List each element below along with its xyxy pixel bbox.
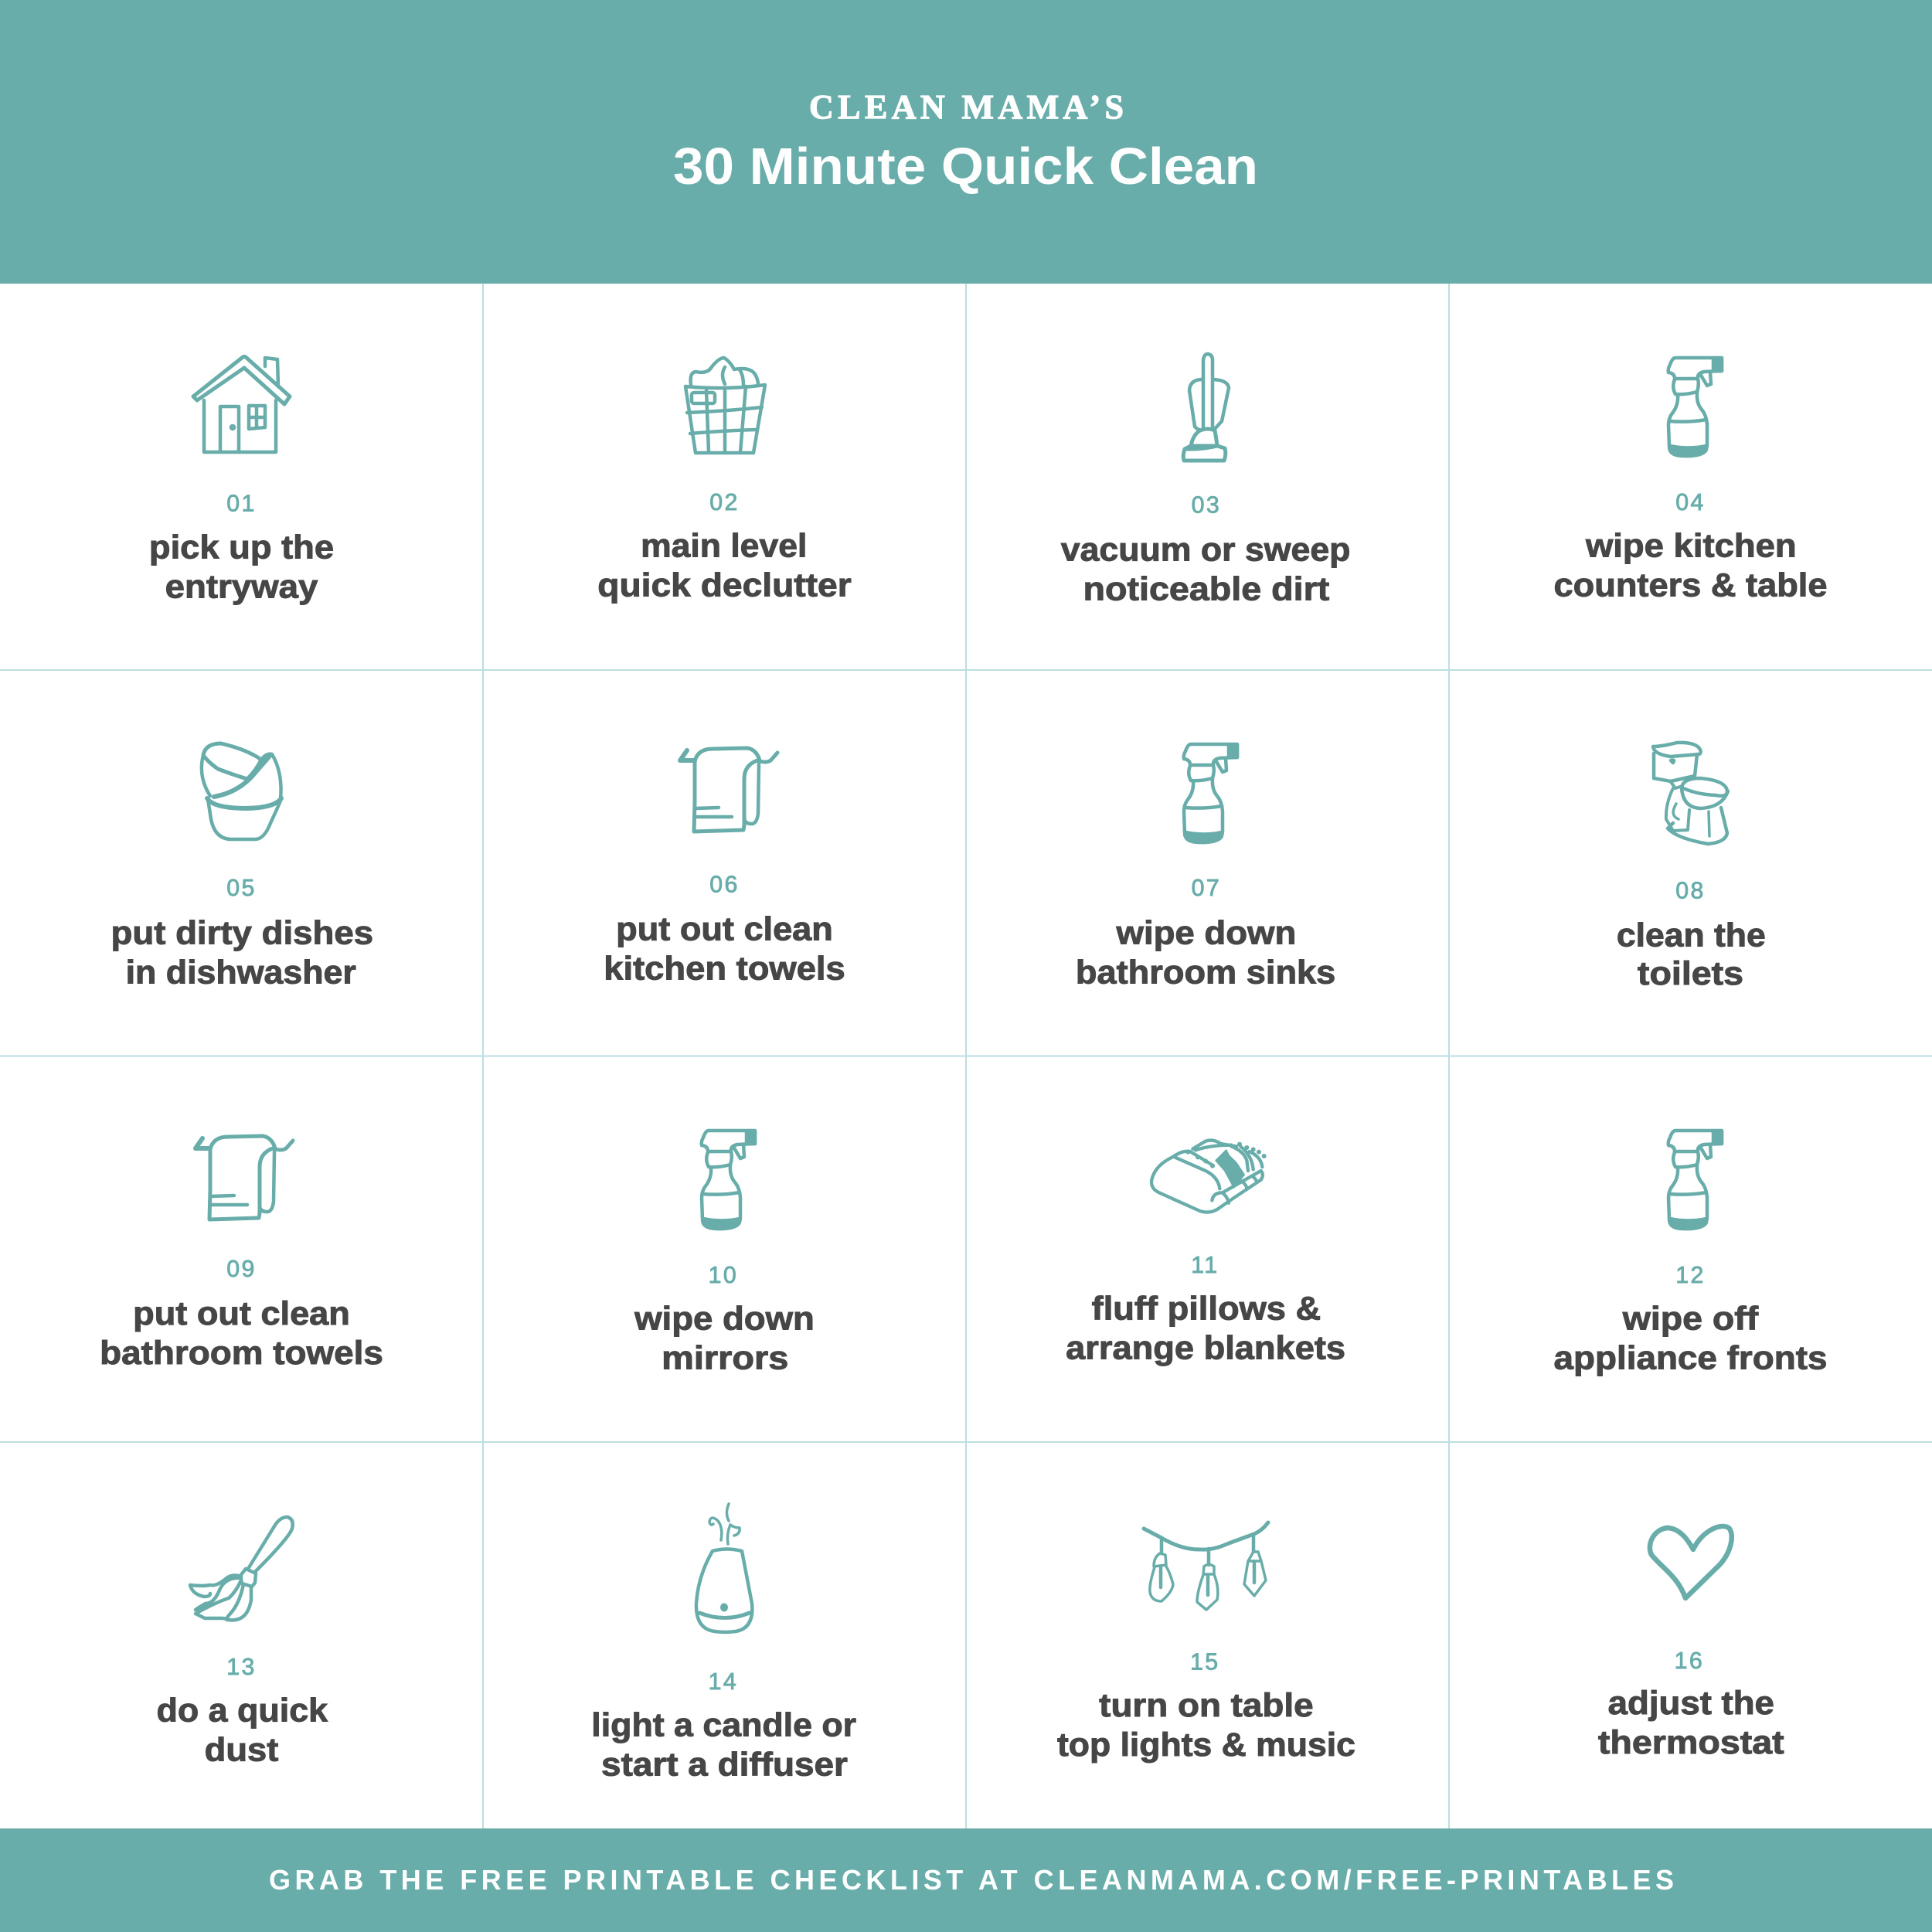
task 05 xyxy=(111,743,373,991)
number 12: 12 xyxy=(1675,1263,1706,1288)
label: toilets xyxy=(1638,955,1743,992)
label: noticeable dirt xyxy=(1083,570,1329,607)
kicker: Clean Mama's: CLEAN MAMA’S xyxy=(809,88,1124,126)
icon: spray bottle xyxy=(702,1131,755,1229)
task 14 xyxy=(591,1504,856,1784)
task 15 xyxy=(1057,1522,1355,1764)
footer banner xyxy=(0,1828,1932,1932)
label: bathroom towels xyxy=(100,1335,383,1372)
icon: heart xyxy=(1650,1526,1732,1598)
title: 30 Minute Quick Clean xyxy=(673,138,1258,196)
label: thermostat xyxy=(1598,1724,1784,1761)
number 04: 04 xyxy=(1675,490,1706,515)
task 12 xyxy=(1554,1131,1827,1376)
label: put out clean xyxy=(616,911,833,948)
task 06 xyxy=(604,748,845,988)
number 14: 14 xyxy=(709,1669,738,1695)
task 01 xyxy=(149,357,334,605)
label: entryway xyxy=(165,568,318,605)
number 08: 08 xyxy=(1675,878,1706,903)
task 07 xyxy=(1076,744,1335,991)
label: turn on table xyxy=(1099,1687,1314,1724)
label: in dishwasher xyxy=(126,954,356,991)
icon: spray bottle xyxy=(1668,1131,1722,1229)
label: arrange blankets xyxy=(1066,1330,1345,1367)
icon: feather duster xyxy=(190,1517,293,1620)
label: fluff pillows & xyxy=(1092,1291,1321,1328)
task 02 xyxy=(597,358,852,604)
label: appliance fronts xyxy=(1554,1339,1827,1376)
task 09 xyxy=(100,1136,383,1372)
label: light a candle or xyxy=(591,1706,856,1743)
icon: bowls xyxy=(202,743,281,839)
number 16: 16 xyxy=(1675,1648,1704,1674)
label: do a quick xyxy=(156,1692,328,1729)
number 11: 11 xyxy=(1191,1253,1219,1278)
label: put out clean xyxy=(133,1295,350,1332)
icon: house xyxy=(193,357,290,452)
number 09: 09 xyxy=(226,1257,257,1282)
label: wipe off xyxy=(1622,1300,1759,1337)
task 13 xyxy=(156,1517,328,1768)
label: mirrors xyxy=(662,1339,788,1376)
number 05: 05 xyxy=(226,876,257,901)
number 03: 03 xyxy=(1192,492,1221,518)
label: quick declutter xyxy=(597,567,852,604)
icon: laundry basket xyxy=(685,358,765,453)
label: pick up the xyxy=(149,529,334,566)
label: put dirty dishes xyxy=(111,914,373,951)
task 03 xyxy=(1061,354,1350,607)
label: clean the xyxy=(1617,917,1766,954)
number 10: 10 xyxy=(709,1263,738,1288)
footer call to action: GRAB THE FREE PRINTABLE CHECKLIST AT CLEANMAMA.COM/FREE-PRINTABLES xyxy=(269,1864,1674,1896)
label: vacuum or sweep xyxy=(1061,531,1350,568)
task 11 xyxy=(1066,1141,1345,1367)
icon: string lights xyxy=(1144,1522,1268,1610)
header banner xyxy=(0,0,1932,284)
number 07: 07 xyxy=(1192,876,1221,901)
task 04 xyxy=(1554,358,1827,604)
label: wipe down xyxy=(1115,914,1296,951)
icon: diffuser xyxy=(696,1504,752,1632)
icon: folded blankets xyxy=(1151,1141,1267,1213)
icon: bathroom towel xyxy=(196,1136,293,1219)
icon: kitchen towel xyxy=(680,748,777,832)
label: wipe down xyxy=(634,1300,815,1337)
label: dust xyxy=(205,1731,278,1768)
label: bathroom sinks xyxy=(1076,954,1335,991)
task 16 xyxy=(1598,1526,1784,1761)
icon: spray bottle xyxy=(1184,744,1237,842)
number 01: 01 xyxy=(226,492,257,517)
label: top lights & music xyxy=(1057,1726,1355,1764)
label: wipe kitchen xyxy=(1585,528,1797,565)
label: main level xyxy=(641,528,807,565)
icon: toilet xyxy=(1653,743,1728,844)
icon: vacuum xyxy=(1183,354,1229,461)
number 15: 15 xyxy=(1190,1649,1220,1675)
task 10 xyxy=(634,1131,815,1376)
label: start a diffuser xyxy=(601,1747,848,1784)
task 08 xyxy=(1617,743,1766,992)
number 02: 02 xyxy=(709,490,740,515)
label: counters & table xyxy=(1554,567,1827,604)
number 13: 13 xyxy=(226,1655,257,1680)
label: adjust the xyxy=(1608,1685,1774,1722)
label: kitchen towels xyxy=(604,951,845,988)
icon: spray bottle xyxy=(1668,358,1722,456)
number 06: 06 xyxy=(709,872,740,897)
